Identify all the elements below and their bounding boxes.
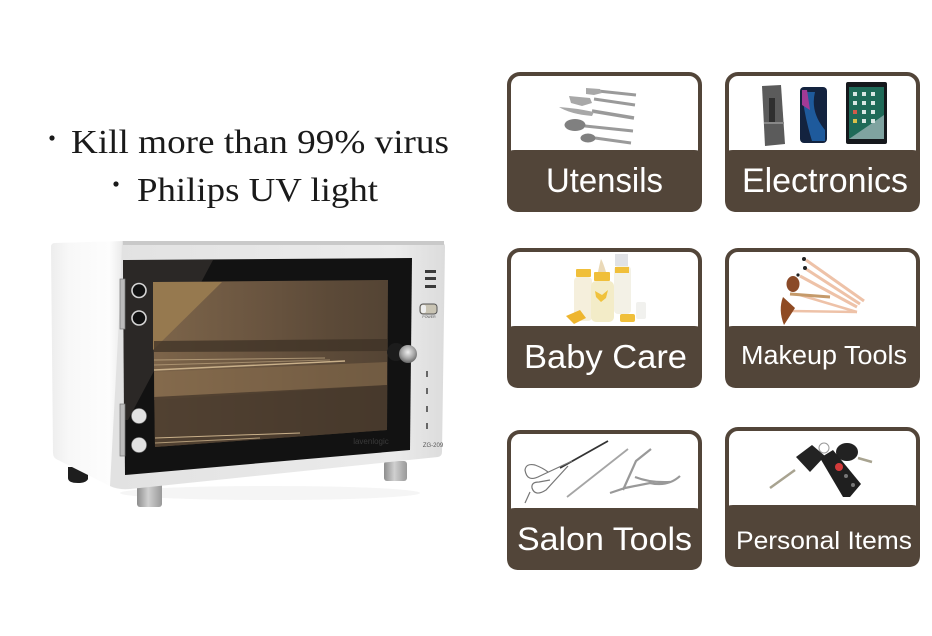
cabinet side	[51, 241, 124, 489]
label: Baby Care	[524, 338, 687, 375]
cabinet front frame	[110, 241, 445, 489]
card: Personal Items	[725, 429, 920, 567]
icon: scissors	[525, 441, 608, 503]
icon: cutlery	[559, 88, 636, 143]
front left foot	[137, 483, 162, 507]
rear foot	[68, 467, 88, 483]
icon: tablet	[846, 82, 887, 144]
icon: car keys	[770, 443, 872, 497]
vent slots	[425, 270, 436, 288]
card: Utensils	[507, 74, 702, 212]
wire rack	[154, 358, 345, 443]
label band	[725, 150, 920, 212]
card: Makeup Tools	[725, 250, 920, 388]
label band	[507, 508, 702, 570]
brand mark: lavenlogic	[353, 437, 389, 446]
icon: cuticle pusher	[567, 449, 628, 497]
indicator marks	[426, 371, 428, 429]
card: Baby Care	[507, 250, 702, 388]
label band	[725, 326, 920, 388]
label band	[507, 150, 702, 212]
power switch: POWER	[422, 315, 436, 319]
label: Personal Items	[736, 527, 912, 555]
power switch	[420, 304, 437, 319]
icon: phone	[800, 87, 827, 143]
label band	[507, 326, 702, 388]
bullet and text: virus kill rate: Kill more than 99% virus	[71, 124, 449, 161]
card: Salon Tools	[507, 432, 702, 570]
label band	[725, 505, 920, 567]
card: Electronics	[725, 74, 920, 212]
model label: ZG-209	[423, 443, 444, 449]
front right foot	[384, 461, 407, 481]
door handle	[387, 343, 417, 363]
heading: feature list	[49, 124, 449, 209]
icon: makeup brushes	[781, 257, 864, 325]
lower door buttons	[132, 408, 146, 452]
icon: remote	[762, 85, 785, 146]
label: Salon Tools	[517, 521, 692, 557]
label: Electronics	[742, 162, 908, 200]
icon: nail nippers	[610, 449, 680, 493]
label: Makeup Tools	[741, 342, 907, 370]
icon: baby bottles	[566, 254, 646, 324]
door window	[153, 280, 388, 447]
floor shadow	[120, 486, 420, 500]
door panel	[123, 258, 412, 475]
bullet and text: Philips UV light: Philips UV light	[137, 172, 379, 209]
upper door dials	[132, 284, 146, 325]
hinges	[120, 279, 125, 456]
product: UV sterilizer cabinet	[51, 241, 445, 507]
label: Utensils	[546, 162, 663, 200]
